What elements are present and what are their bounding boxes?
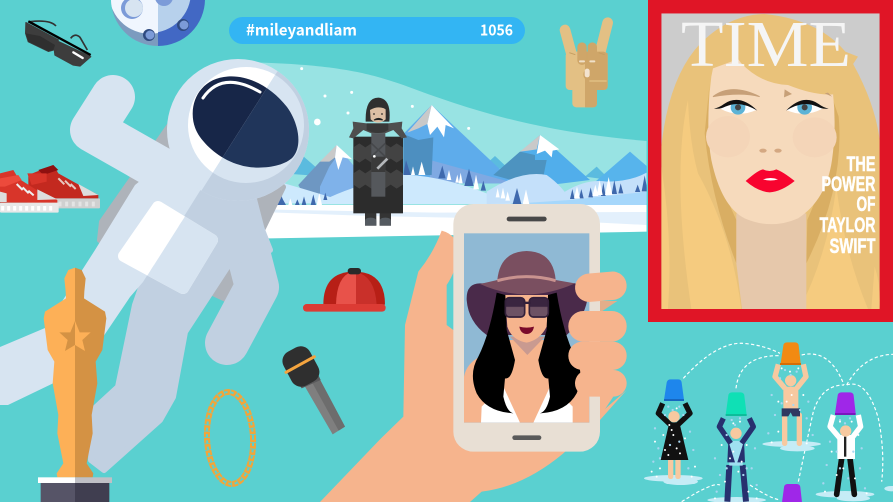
person: swimmer <box>775 342 806 443</box>
person: black dress <box>658 379 690 479</box>
magazine cover: TIME, Taylor Swift <box>648 0 893 322</box>
puddles <box>644 441 893 502</box>
masthead: TIME <box>681 8 851 81</box>
person: navy suit <box>719 392 753 502</box>
water drops <box>653 370 865 492</box>
chest plate <box>124 207 212 288</box>
icon: rock hand <box>565 23 608 107</box>
hashtag bar <box>229 17 525 44</box>
cover headline: THE <box>846 153 876 176</box>
cover headline <box>820 153 876 258</box>
bucket: bottom <box>782 484 802 502</box>
illustration: snowy mountain landscape <box>260 63 648 238</box>
selfie: woman in hat <box>464 251 589 423</box>
icon: red sneakers <box>0 165 100 213</box>
helmet <box>167 59 309 201</box>
phone <box>453 204 600 452</box>
character: Jon Snow <box>349 98 407 226</box>
hashtag label: #mileyandliam <box>246 18 357 40</box>
icon: red cap <box>303 268 386 312</box>
cover headline: OF <box>856 193 876 216</box>
illustration: ice bucket challenge <box>644 342 893 502</box>
hashtag count: 1056 <box>480 18 513 40</box>
dashed arcs <box>682 343 893 502</box>
icon: moon <box>111 0 205 46</box>
hand <box>320 231 627 502</box>
illustration: astronaut <box>0 59 309 470</box>
illustration: Oscar statuette <box>38 268 112 502</box>
person: white shirt <box>830 392 861 494</box>
icon: sunglasses <box>26 21 91 66</box>
icon: microphone <box>279 343 345 434</box>
cover headline: SWIFT <box>830 235 876 258</box>
illustration: hand holding phone <box>320 204 628 502</box>
icon: gold chain <box>205 391 255 485</box>
fingers <box>568 270 628 417</box>
